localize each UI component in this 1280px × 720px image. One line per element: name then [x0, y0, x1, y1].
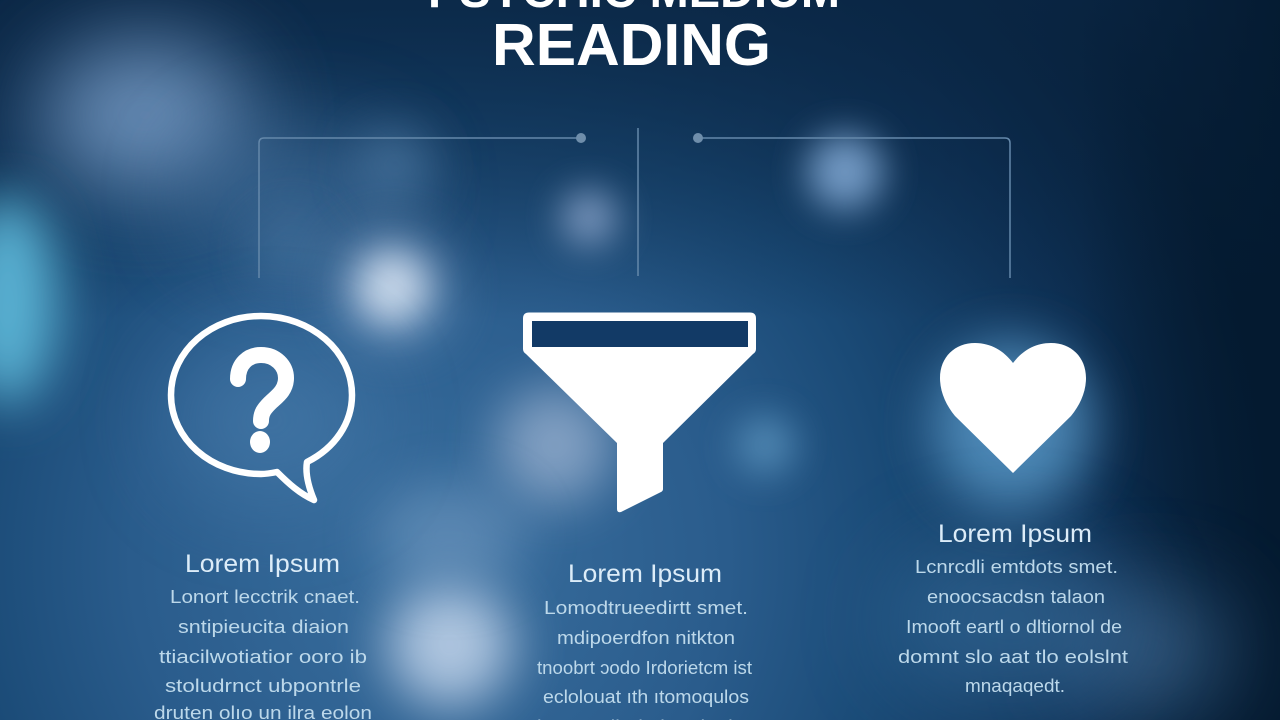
body: column 2: [537, 598, 752, 720]
body: column 1: Lonort lecctrik cnaet.: [170, 587, 360, 607]
heading: column 2: Lorem Ipsum: [568, 560, 722, 588]
body: column 2: Lomodtrueedirtt smet.: [544, 598, 748, 618]
title: READING: [492, 12, 771, 78]
connector: center line: [637, 128, 639, 276]
body: column 3: enoocsacdsn talaon: [927, 587, 1105, 607]
body: column 2: mdipoerdfon nitkton: [557, 628, 735, 648]
body: column 1: ttiacilwotiatior ooro ib: [159, 647, 367, 667]
body: column 2: eclolouat ıth ıtomoqulos: [543, 687, 749, 707]
heading: column 1: Lorem Ipsum: [185, 550, 340, 578]
body: column 1: stoludrnct ubpontrle: [165, 676, 361, 696]
heading: column 3: Lorem Ipsum: [938, 520, 1092, 548]
column 3 text: [898, 520, 1128, 696]
icon: heart: [940, 343, 1086, 473]
body: column 2: tnoobrt ɔodo Irdorietcm ist: [537, 658, 752, 678]
icon: speech bubble with question mark: [171, 316, 352, 500]
body: column 3: domnt slo aat tlo eolslnt: [898, 647, 1128, 667]
connector: left branch: [259, 133, 586, 278]
icon: funnel: [523, 312, 756, 512]
body: column 3: mnaqaqedt.: [965, 676, 1065, 696]
body: column 3: [898, 557, 1128, 696]
title: [428, 0, 840, 78]
column 2 text: [537, 560, 752, 720]
body: column 3: Lcnrcdli emtdots smet.: [915, 557, 1118, 577]
body: column 1: sntipieucita diaion: [178, 617, 349, 637]
body: column 1: [154, 587, 372, 720]
body: column 3: Imooft eartl o dltiornol de: [906, 617, 1122, 637]
connector: right branch: [693, 133, 1010, 278]
column 1 text: [154, 550, 372, 720]
